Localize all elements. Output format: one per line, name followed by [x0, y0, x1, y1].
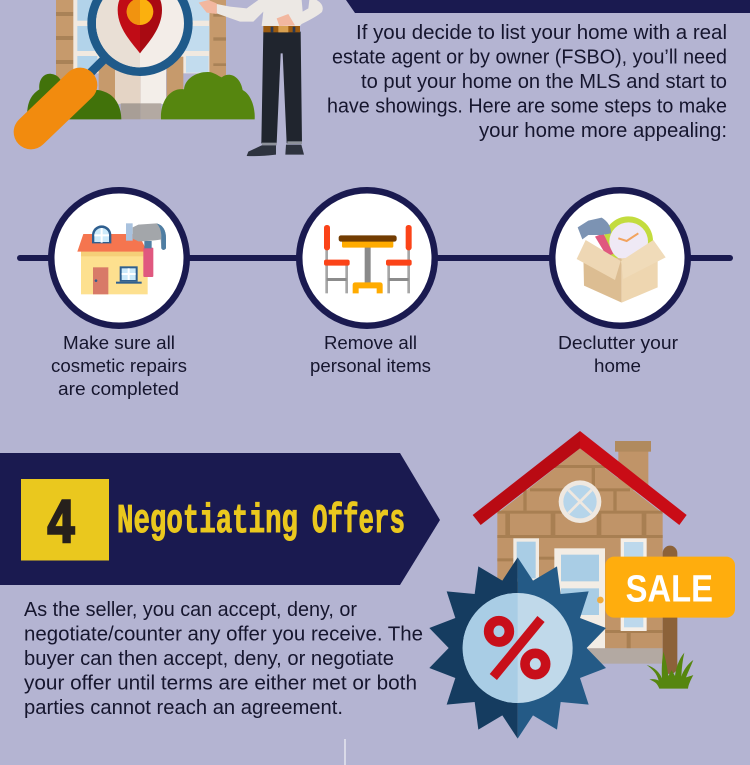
agent figure	[199, 0, 323, 156]
label: Make sure all	[63, 333, 175, 353]
intro paragraph: If you decide to list your home with a real	[356, 22, 727, 44]
icon: table and chairs	[324, 225, 412, 293]
illustration: house for sale with discount badge	[429, 431, 735, 739]
bottom vertical connector	[344, 739, 346, 765]
label: Remove all	[324, 333, 417, 353]
label	[558, 333, 678, 376]
label: are completed	[58, 379, 179, 399]
building facade	[56, 0, 226, 119]
intro paragraph: to put your home on the MLS and start to	[361, 71, 727, 93]
number box	[21, 479, 109, 560]
label: Declutter your	[558, 333, 678, 353]
label: home	[594, 356, 641, 376]
intro paragraph: have showings. Here are some steps to make	[327, 96, 727, 118]
round window	[559, 480, 601, 523]
intro paragraph	[327, 22, 727, 142]
circle badge	[51, 190, 187, 326]
heading: Negotiating	[117, 499, 298, 545]
icon: moving box with hammer and clock	[577, 216, 666, 303]
body paragraph: your offer until terms are either met or both	[24, 672, 417, 694]
step 2: personal items	[299, 190, 435, 376]
door	[554, 548, 605, 648]
top navy banner edge	[346, 0, 750, 13]
for sale sign: SALE	[626, 569, 713, 611]
brick house	[473, 431, 687, 664]
step 1: cosmetic repairs	[51, 190, 187, 399]
label	[51, 333, 187, 399]
circle badge	[552, 190, 688, 326]
body paragraph: parties cannot reach an agreement.	[24, 697, 343, 719]
icon: discount badge	[429, 557, 606, 739]
for sale sign	[605, 546, 735, 674]
side windows	[513, 538, 647, 631]
label: personal items	[310, 356, 431, 376]
bushes	[27, 72, 255, 119]
banner arrow	[0, 453, 440, 585]
intro paragraph: your home more appealing:	[479, 120, 727, 142]
grass	[647, 652, 693, 689]
body paragraph	[24, 599, 423, 719]
body paragraph: buyer can then accept, deny, or negotiate	[24, 648, 394, 670]
icon: house and hammer	[77, 223, 166, 294]
section 4 banner	[0, 453, 440, 585]
doorstep	[588, 648, 663, 664]
heading: Offers	[312, 499, 405, 545]
roof	[473, 431, 687, 525]
step 3: declutter	[552, 190, 688, 376]
label: cosmetic repairs	[51, 356, 187, 376]
illustration: house with magnifier and agent	[27, 0, 323, 156]
body paragraph: As the seller, you can accept, deny, or	[24, 599, 357, 621]
timeline connector	[20, 255, 730, 261]
intro paragraph: estate agent or by owner (FSBO), you’ll need	[332, 46, 727, 68]
body paragraph: negotiate/counter any offer you receive. The	[24, 624, 423, 646]
number box: 4	[48, 488, 75, 555]
icon: magnifying glass with map pin	[31, 0, 188, 132]
circle badge	[299, 190, 435, 326]
label	[310, 333, 431, 376]
